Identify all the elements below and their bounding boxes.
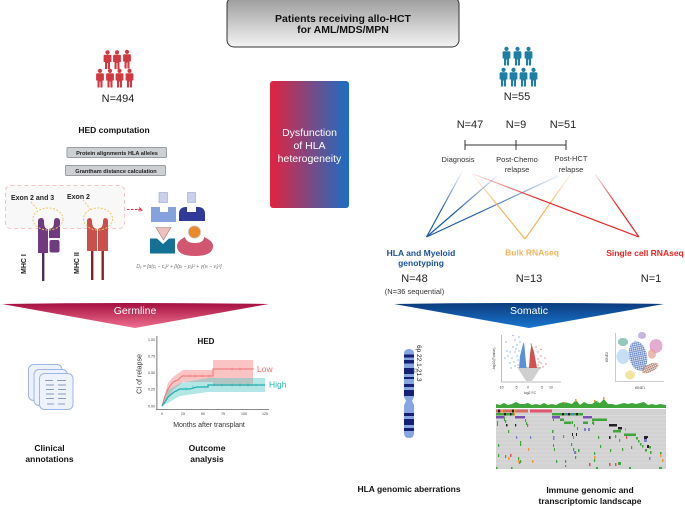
timeline: sampling points [442, 119, 588, 174]
chart: HED cumulative incidence of relapse: High [269, 380, 287, 390]
chart: HED cumulative incidence of relapse: Low [257, 364, 273, 374]
label: clinical annotations: annotations [25, 454, 74, 464]
icon: red patient group N=494: N=494 [102, 93, 134, 105]
label: outcome analysis: analysis [190, 454, 224, 464]
chart: volcano plot: -5 [514, 386, 518, 390]
heading: HED computation: HED computation [78, 125, 150, 135]
chart: volcano plot: log2 FC [524, 391, 537, 395]
chart: HED cumulative incidence of relapse [136, 336, 287, 429]
title box [227, 0, 459, 47]
central panel: dysfunction of HLA heterogeneity [270, 81, 349, 208]
chart: HED cumulative incidence of relapse: 50 [201, 412, 205, 416]
banner: Germline [2, 303, 269, 328]
chart: volcano plot: 5 [541, 386, 543, 390]
timeline: sampling points: relapse [559, 165, 583, 174]
banner: Somatic: Somatic [510, 305, 548, 317]
formula: Dᵢⱼ = [α(cᵢ − cⱼ)² + β(pᵢ − pⱼ)² + γ(vᵢ − vⱼ)²] [136, 264, 222, 270]
central panel: dysfunction of HLA heterogeneity: heterogeneity [278, 153, 342, 165]
icon: MHC I [38, 218, 60, 281]
label: Bulk RNAseq: Bulk RNAseq [505, 248, 559, 258]
chromosome ideogram: 6p 22.1-21.3 [415, 345, 422, 382]
label: MHC II: MHC II [74, 252, 81, 274]
label: HLA and Myeloid genotyping: HLA and Myeloid [387, 248, 455, 258]
chart: volcano plot: 10 [549, 386, 553, 390]
chart: HED cumulative incidence of relapse: 100 [241, 412, 247, 416]
chart: volcano plot: 0 [527, 386, 529, 390]
chart: volcano plot: -10 [498, 386, 504, 390]
exon highlight box with MHC molecules [6, 186, 124, 281]
chart: mutation oncoplot [496, 397, 666, 469]
chart: HED cumulative incidence of relapse: HED [198, 337, 215, 346]
chart: volcano plot [492, 335, 561, 395]
label: immune genomic and transcriptomic landscape: Immune genomic and [546, 485, 634, 495]
label: outcome analysis: Outcome [189, 443, 226, 453]
icon: clinical documents [28, 364, 73, 410]
exon highlight box with MHC molecules: Exon 2 and 3 [11, 195, 54, 202]
timeline: sampling points: N=9 [506, 119, 526, 131]
central panel: dysfunction of HLA heterogeneity: of HLA [293, 140, 326, 152]
timeline: sampling points: N=47 [457, 119, 483, 131]
label: HLA and Myeloid genotyping: N=48 [401, 273, 428, 285]
label: Single cell RNAseq: Single cell RNAseq [606, 248, 684, 258]
label: clinical annotations [25, 443, 74, 464]
chart: HED cumulative incidence of relapse: 0.00 [148, 404, 155, 408]
chart: HED cumulative incidence of relapse: Months after transplant [173, 422, 245, 429]
timeline: sampling points: N=51 [550, 119, 576, 131]
icon: MHC II [87, 218, 108, 280]
mutation burden histogram [496, 397, 666, 408]
chromosome ideogram [404, 345, 422, 438]
chart: tSNE clusters: tSNE2 [605, 352, 609, 362]
title box: for AML/MDS/MPN [297, 24, 389, 36]
icon: blue patient group N=55 [500, 47, 537, 103]
label: Bulk RNAseq: N=13 [516, 273, 542, 285]
exon highlight box with MHC molecules: Exon 2 [67, 194, 90, 201]
banner: Germline: Germline [114, 305, 156, 317]
label: HLA genomic aberrations: HLA genomic aberrations [357, 484, 461, 494]
chart: tSNE clusters: tSNE1 [635, 386, 645, 390]
label: immune genomic and transcriptomic landscape [539, 485, 642, 506]
chart: tSNE clusters [605, 332, 664, 390]
timeline: sampling points: relapse [505, 165, 529, 174]
chart: HED cumulative incidence of relapse: 125 [262, 412, 268, 416]
chart: HED cumulative incidence of relapse: CI of relapse [136, 354, 144, 394]
chart: HED cumulative incidence of relapse: 0 [161, 412, 163, 416]
arrow: dashed to binding pockets [127, 208, 144, 212]
chart: HED cumulative incidence of relapse: 0.50 [148, 371, 155, 375]
label: MHC I: MHC I [21, 254, 28, 274]
icon: red patient group N=494 [96, 50, 134, 105]
central panel: dysfunction of HLA heterogeneity: Dysfunction [282, 127, 337, 139]
banner: Somatic [394, 303, 664, 328]
timeline: sampling points: Post-HCT [555, 154, 588, 163]
step: protein alignments: Protein alignments HLA alleles [76, 151, 158, 157]
timeline: sampling points: Diagnosis [442, 155, 475, 164]
chart: HED cumulative incidence of relapse: 25 [181, 412, 185, 416]
icon: peptide binding pockets [150, 192, 213, 256]
chart: HED cumulative incidence of relapse: 0.25 [148, 388, 155, 392]
label: Bulk RNAseq [505, 248, 559, 285]
label: HLA and Myeloid genotyping [385, 248, 455, 296]
chart: HED cumulative incidence of relapse: 0.75 [148, 354, 155, 358]
label: immune genomic and transcriptomic landscape: transcriptomic landscape [539, 496, 642, 506]
step: protein alignments [67, 148, 166, 158]
timeline: sampling points: Post-Chemo [496, 155, 538, 164]
label: Single cell RNAseq: N=1 [641, 273, 661, 285]
label: Single cell RNAseq [606, 248, 684, 285]
icon: blue patient group N=55: N=55 [504, 91, 530, 103]
title box: Patients receiving allo-HCT [275, 13, 412, 25]
step: Grantham distance: Grantham distance calculation [75, 169, 157, 175]
label: outcome analysis [189, 443, 226, 464]
step: Grantham distance [66, 166, 166, 176]
label: clinical annotations: Clinical [34, 443, 65, 453]
chart: HED cumulative incidence of relapse: 75 [221, 412, 225, 416]
chart: HED cumulative incidence of relapse: 1.00 [148, 338, 155, 342]
label: HLA and Myeloid genotyping: (N=36 sequential) [385, 287, 445, 296]
label: HLA and Myeloid genotyping: genotyping [398, 258, 444, 268]
chart: volcano plot: -log10(Pvalue) [492, 348, 496, 370]
connector lines: samples to assays [426, 170, 639, 239]
